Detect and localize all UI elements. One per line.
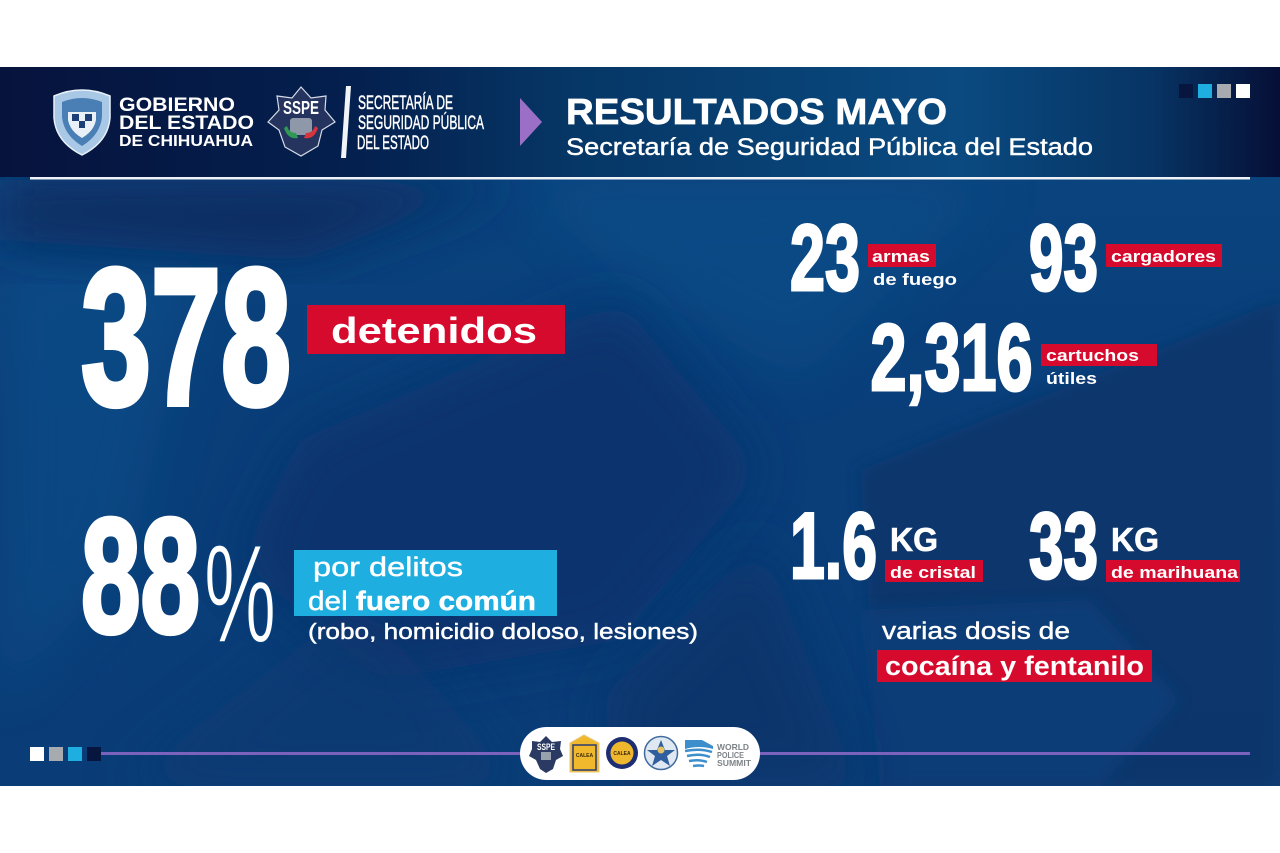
decorative squares bottom left [30, 747, 101, 761]
stat: 2,316 cartuchos útiles: 2,316 [870, 305, 1032, 411]
stat: varias dosis de cocaína y fentanilo [877, 618, 1152, 682]
stat: 88% por delitos: (robo, homicidio doloso, lesiones) [308, 619, 698, 644]
icon: CALEA shield: CALEA [576, 753, 593, 759]
stat: 1.6 KG de cristal: KG [890, 521, 938, 558]
background panel [0, 177, 1280, 786]
stat: 33 KG de marihuana: 33 [1029, 493, 1098, 598]
logo text: World Police Summit: WORLD [717, 742, 749, 752]
stat: 88% por delitos: por delitos [313, 552, 463, 582]
logo text: Secretaría de Seguridad Pública del Estado [357, 93, 484, 154]
title: RESULTADOS MAYO [566, 91, 947, 132]
decorative squares top right [1179, 84, 1250, 98]
icon: CALEA shield [570, 735, 599, 772]
logo: SSPE badge [268, 87, 335, 156]
stat: 23 armas de fuego: de fuego [873, 270, 957, 289]
stat: 2,316 cartuchos útiles: cartuchos [1046, 346, 1139, 365]
logo text: Gobierno del Estado de Chihuahua: DEL ESTADO [119, 112, 254, 134]
stat: 2,316 cartuchos útiles: útiles [1046, 369, 1097, 388]
stat: 93 cargadores [1029, 205, 1222, 310]
stat: 33 KG de marihuana [1029, 493, 1240, 598]
logo text: Gobierno del Estado de Chihuahua: DE CHIHUAHUA [119, 133, 253, 150]
stat: 93 cargadores: 93 [1029, 205, 1098, 310]
stat: varias dosis de cocaína y fentanilo: cocaína y fentanilo [885, 651, 1144, 681]
logo text: World Police Summit [717, 742, 752, 768]
logo text: Secretaría de Seguridad Pública del Estado: SECRETARÍA DE [358, 93, 453, 114]
footer logos pill [520, 727, 760, 780]
stat: 1.6 KG de cristal [790, 493, 983, 598]
icon: CALEA seal: CALEA [613, 751, 631, 757]
stat: 33 KG de marihuana: de marihuana [1111, 563, 1239, 582]
stat: 1.6 KG de cristal: de cristal [890, 563, 976, 582]
stat: 378 detenidos [81, 229, 565, 446]
stat: 88% por delitos: del fuero común [308, 586, 536, 616]
logo text: World Police Summit: POLICE [717, 750, 744, 760]
logo text: World Police Summit: SUMMIT [717, 758, 752, 768]
stat: 378 detenidos: 378 [81, 229, 291, 446]
stat: 88% por delitos [81, 484, 698, 672]
logo: SSPE badge: SSPE [283, 98, 319, 118]
stat: 23 armas de fuego: 23 [790, 205, 860, 310]
stat: 33 KG de marihuana: KG [1111, 521, 1159, 558]
icon: World Police Summit waves [685, 740, 713, 766]
stat: 23 armas de fuego [790, 205, 957, 310]
logo: Gobierno del Estado shield [54, 90, 110, 155]
stat: 93 cargadores: cargadores [1111, 247, 1216, 266]
arrow: purple triangle [520, 98, 542, 146]
divider: logo separator [341, 86, 351, 158]
logo text: Secretaría de Seguridad Pública del Estado: SEGURIDAD PÚBLICA [358, 112, 484, 134]
icon: star seal [644, 736, 678, 770]
stat: 1.6 KG de cristal: 1.6 [790, 493, 877, 598]
logo text: Gobierno del Estado de Chihuahua [119, 94, 254, 150]
stat: 88% por delitos: 88 [81, 484, 200, 667]
stat: 23 armas de fuego: armas [872, 247, 930, 266]
stat: 88% por delitos: % [204, 515, 276, 672]
stat: 378 detenidos: detenidos [331, 310, 537, 351]
logo text: Secretaría de Seguridad Pública del Estado: DEL ESTADO [357, 133, 429, 154]
icon: SSPE badge small: SSPE [537, 742, 555, 752]
header band [0, 67, 1280, 177]
logo text: Gobierno del Estado de Chihuahua: GOBIERNO [119, 94, 235, 116]
subtitle: Secretaría de Seguridad Pública del Estado [566, 134, 1093, 161]
stat: varias dosis de cocaína y fentanilo: varias dosis de [882, 618, 1070, 645]
icon: SSPE badge small [529, 736, 563, 773]
icon: CALEA seal [606, 737, 638, 769]
footer purple line [95, 752, 1250, 755]
